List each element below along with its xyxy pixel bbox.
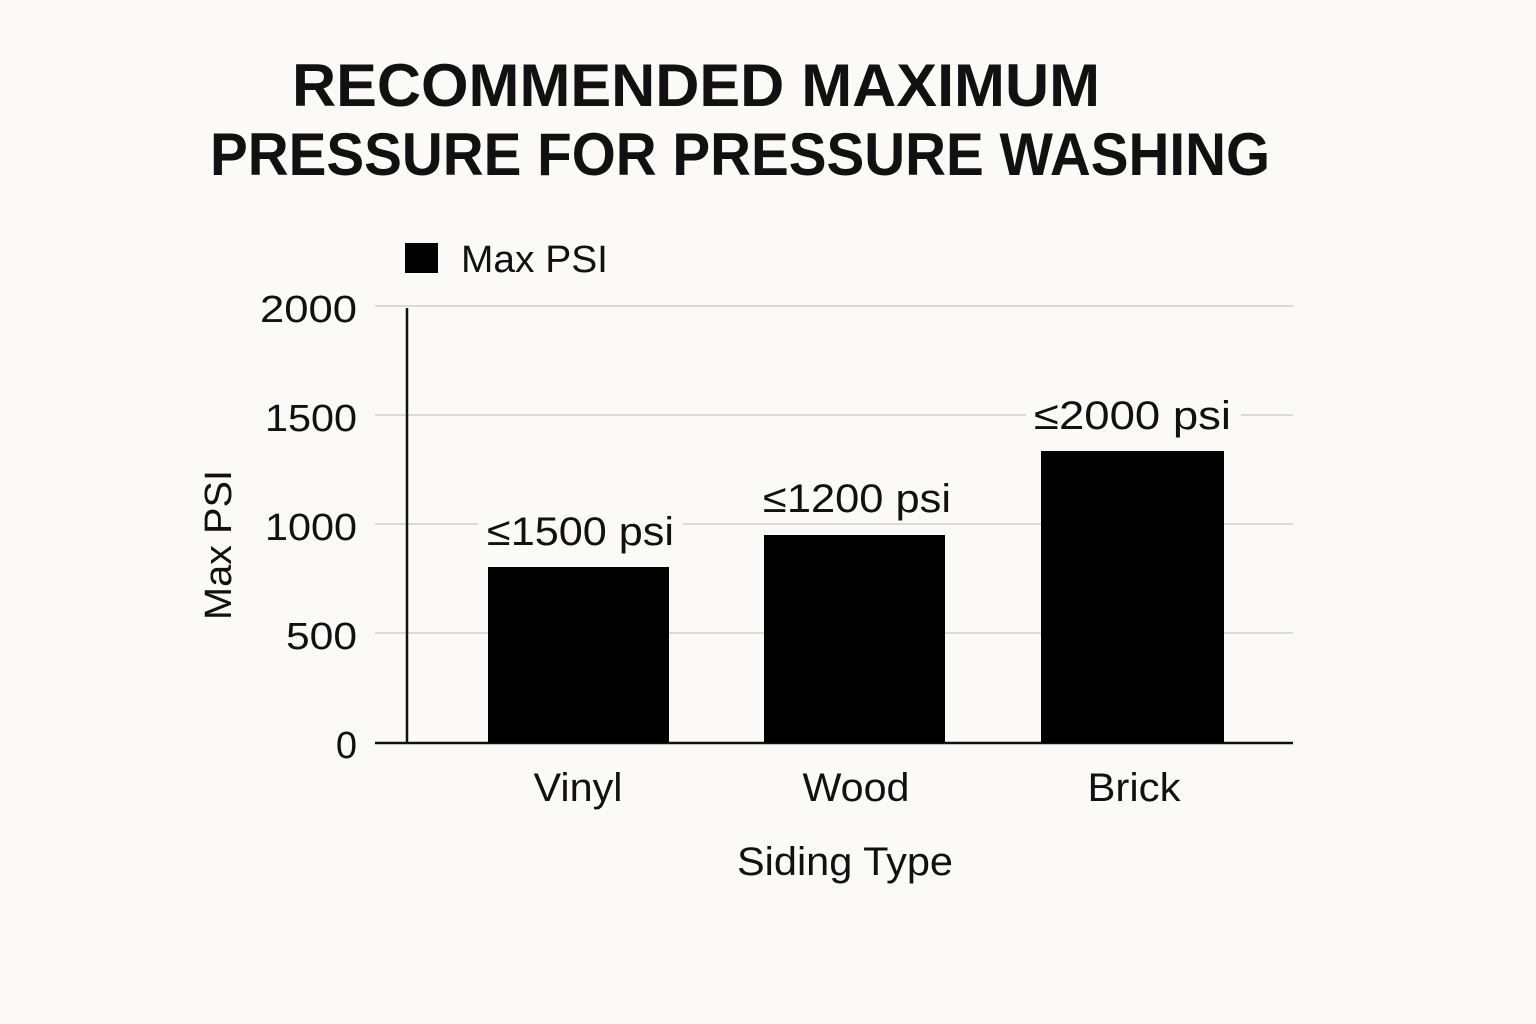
y axis tick labels: 1000 (265, 507, 357, 549)
x axis category labels (534, 766, 1182, 810)
y axis tick labels: 500 (286, 616, 357, 658)
x axis category labels: Wood (802, 766, 910, 810)
value labels: ≤2000 psi (1034, 394, 1231, 438)
bar: wood (764, 535, 945, 743)
title: RECOMMENDED MAXIMUM (292, 52, 1100, 119)
axes (375, 308, 1293, 743)
bar: vinyl (488, 567, 669, 743)
value labels: ≤1500 psi (487, 510, 674, 554)
y axis tick labels (260, 289, 357, 767)
value labels (478, 392, 1241, 554)
x axis title: Siding Type (737, 840, 953, 884)
value labels: ≤1200 psi (763, 477, 951, 521)
x axis category labels: Brick (1088, 766, 1182, 810)
y axis tick labels: 2000 (260, 289, 357, 331)
legend: Max PSI (461, 239, 608, 281)
y axis tick labels: 1500 (265, 398, 357, 440)
y axis tick labels: 0 (336, 725, 357, 767)
y axis title: Max PSI (198, 470, 240, 620)
x axis category labels: Vinyl (534, 766, 622, 810)
title: PRESSURE FOR PRESSURE WASHING (210, 121, 1270, 188)
bar: brick (1041, 451, 1224, 743)
title (210, 52, 1270, 188)
